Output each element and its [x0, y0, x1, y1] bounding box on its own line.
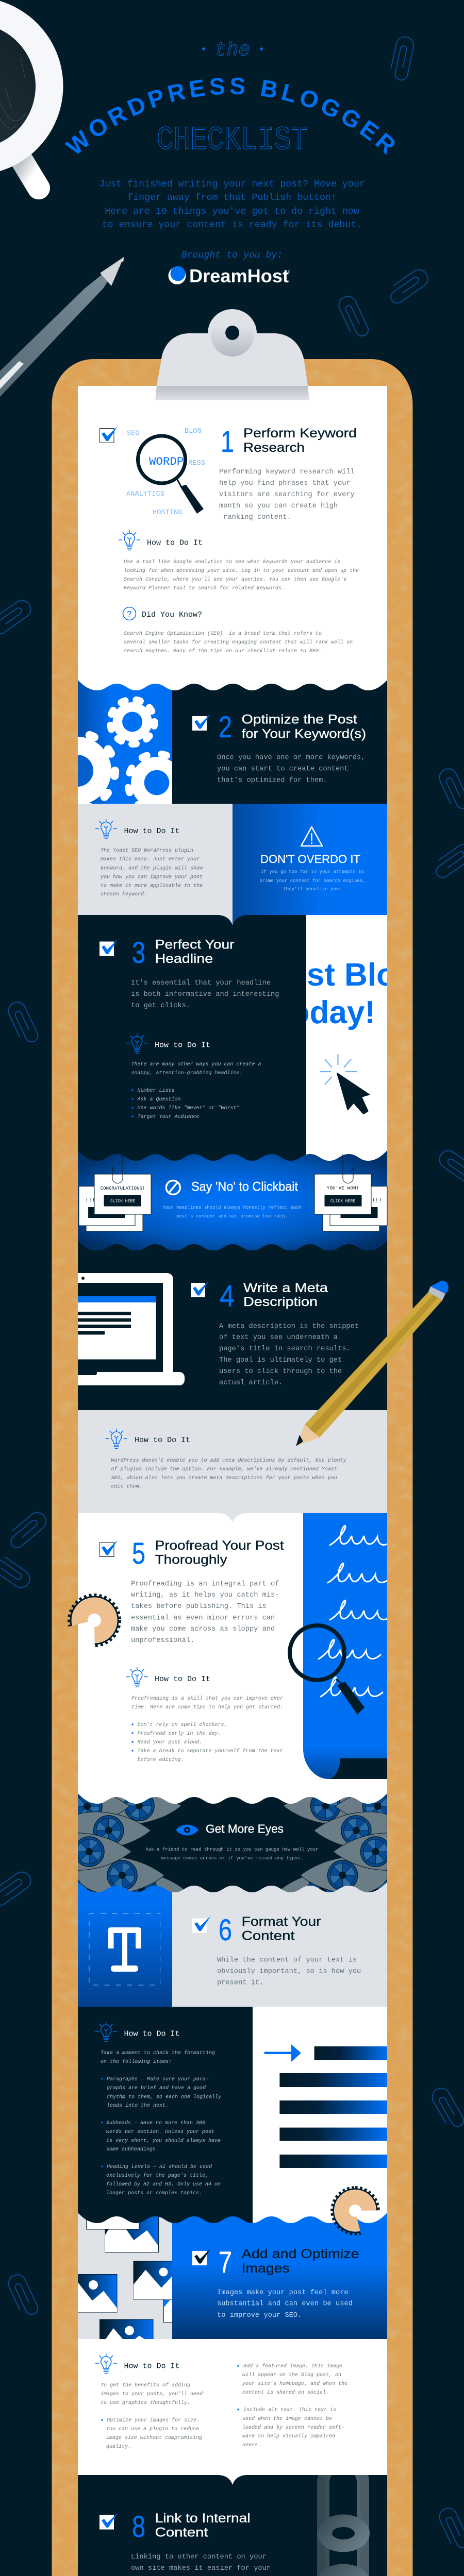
panel: step 2 how to do it — [78, 804, 233, 915]
body text: -ranking content. — [219, 514, 291, 521]
clipboard board — [52, 359, 412, 2576]
title — [64, 39, 395, 159]
how to text: makes this easy. Just enter your — [101, 856, 200, 862]
bullet list: Subheads – Have no more than 300 — [106, 2120, 205, 2126]
bullet list left: image size without compromising — [106, 2435, 202, 2441]
heading: Format Your — [242, 1914, 321, 1929]
body text: make you come across as sloppy and — [131, 1625, 275, 1633]
panel: step 7 images — [78, 2213, 387, 2339]
heading: for Your Keyword(s) — [242, 726, 366, 741]
bullet list: Number Lists — [137, 1088, 175, 1094]
bullet list: longer posts or complex topics. — [106, 2190, 202, 2196]
bullet list: before editing. — [137, 1757, 184, 1763]
how to text: edit them. — [111, 1484, 142, 1490]
bullet list: Target Your Audience — [137, 1114, 200, 1120]
icon: lightbulb — [106, 1429, 127, 1449]
bullet list left: Optimize your images for size. — [107, 2417, 200, 2424]
bullet list: graphs are brief and have a good — [107, 2085, 206, 2091]
bullet list right: used when the image cannot be — [242, 2416, 332, 2422]
speech bubble tail — [219, 915, 246, 925]
torn paper edge — [78, 673, 387, 690]
title: WORDPRESS BLOGGER — [64, 77, 395, 155]
icon: cursor arrow — [337, 1073, 369, 1114]
body text: A meta description is the snippet — [219, 1323, 359, 1330]
bullet list right: users. — [242, 2443, 261, 2448]
illustration: headline and cursor — [306, 962, 387, 1114]
bullet list: Ask a Question — [137, 1096, 181, 1103]
how to text: Use a tool like Google Analytics to see what keywords your audience is — [124, 559, 340, 565]
how to text: chosen keyword. — [101, 891, 147, 897]
bullet list: Proofread early in the day. — [137, 1731, 221, 1737]
checkbox — [191, 1281, 209, 1297]
did you know text: search engines. Many of the tips on our checklist relate to SEO. — [124, 648, 322, 654]
icon: grey pen — [0, 257, 124, 397]
icon: question mark: ? — [127, 610, 132, 620]
clickbait icon — [166, 1181, 180, 1194]
bullet list: Heading Levels – H1 should be used — [107, 2164, 212, 2170]
right stacked tickets — [314, 1154, 387, 1231]
callout heading: Say 'No' to Clickbait — [191, 1179, 298, 1194]
bullet list right: Include alt text. This text is — [243, 2407, 336, 2413]
bullet list right: loaded and by screen reader soft- — [242, 2425, 344, 2431]
headline fragment: Blog — [344, 957, 416, 993]
callout heading: DON'T OVERDO IT — [260, 853, 360, 866]
bullet list right: content is shared on social. — [242, 2389, 329, 2396]
how to text: images to your posts, you'll need — [101, 2391, 203, 2397]
panel: paper sheet — [78, 386, 387, 2576]
left stacked tickets: CLICK HERE — [110, 1199, 135, 1204]
how to do it heading: How to Do It — [155, 1675, 210, 1684]
panel: step 3 headline — [78, 915, 306, 1157]
body text: The goal is ultimately to get — [219, 1357, 342, 1364]
body text: essential as even minor errors can — [131, 1614, 275, 1622]
body text: to improve your SEO. — [217, 2312, 302, 2319]
left stacked tickets: CONGRATULATIONS! — [101, 1186, 145, 1191]
body text: Once you have one or more keywords, — [217, 754, 365, 761]
how to text: to use graphics thoughtfully. — [101, 2400, 190, 2406]
right stacked tickets: !!! — [372, 1198, 382, 1205]
intro text: Just finished writing your next post? Move your — [99, 179, 365, 190]
body text: It's essential that your headline — [131, 979, 271, 987]
heading: Optimize the Post — [242, 713, 357, 727]
checkbox — [100, 939, 118, 956]
illustration: chain — [317, 2475, 370, 2576]
icon: lightbulb — [95, 2022, 117, 2041]
headline fragment: st — [307, 957, 335, 993]
checkbox — [100, 426, 118, 443]
body text: visitors are searching for every — [219, 491, 355, 499]
callout text: they'll penalize you. — [283, 887, 342, 892]
panel: step 4 meta description — [62, 1241, 387, 1410]
title: CHECKLIST — [157, 122, 308, 159]
panel: step 1 keyword research — [100, 425, 359, 654]
icon: question mark — [123, 607, 136, 620]
how to text: looking for when accessing your site. Log in to your account and open up the — [124, 568, 359, 574]
bullet list: words per section. Unless your post — [106, 2129, 214, 2135]
panel: step 8 internal links — [78, 2475, 387, 2576]
body text: you can start to create content — [217, 766, 349, 773]
icon: lightbulb — [119, 530, 140, 550]
illustration: laptop — [78, 1273, 185, 1385]
how to do it heading: How to Do It — [124, 2362, 180, 2370]
left stacked tickets — [79, 1154, 151, 1231]
body text: that's optimized for them. — [217, 777, 327, 784]
bullet list — [131, 1722, 283, 1763]
title: the — [215, 39, 250, 61]
heading: Add and Optimize — [242, 2247, 359, 2261]
icon: click rays — [320, 1054, 357, 1084]
number 6: 6 — [219, 1913, 232, 1947]
did you know text: several smaller tasks for creating engaging content that will rank well on — [124, 639, 353, 646]
number 7: 7 — [219, 2246, 232, 2279]
headline fragment: Today! — [273, 995, 375, 1030]
bullet list left: quality. — [106, 2444, 131, 2450]
left stacked tickets: !!! — [85, 1198, 95, 1205]
how to do it heading: How to Do It — [155, 1041, 210, 1049]
illustration: magnifier with keywords: SEO — [127, 430, 140, 438]
right stacked tickets: YOU'VE WON! — [327, 1185, 359, 1191]
heading: Content — [155, 2525, 208, 2539]
how to text: SEO, which also lets you create meta descriptions for your posts when you — [111, 1475, 337, 1481]
how to text: Keyword Planner tool to search for related keywords. — [124, 585, 285, 591]
logo: DreamHost: DreamHost — [189, 265, 289, 286]
illustration: magnifier with keywords: HOSTING — [153, 509, 183, 517]
panel: step 7 how to do it — [78, 2339, 387, 2475]
panel: get more eyes — [78, 1793, 387, 1892]
body text: unprofessional. — [131, 1637, 194, 1645]
panel: step 6 how to do it — [78, 2007, 387, 2234]
how to do it heading: How to Do It — [124, 827, 180, 836]
bullet list: Don't rely on spell checkers. — [137, 1722, 227, 1728]
how to do it heading: How to Do It — [124, 2029, 180, 2038]
callout text: post's content and not promise too much. — [176, 1214, 288, 1219]
number 2: 2 — [219, 710, 232, 744]
bullet list right: Add a featured image. This image — [243, 2363, 342, 2369]
heading: Perfect Your — [155, 937, 235, 952]
bullet list: Read your post aloud. — [137, 1739, 203, 1745]
bullet list: exclusively for the page's title, — [106, 2173, 208, 2179]
bullet list — [131, 1088, 240, 1120]
heading: Research — [243, 440, 305, 455]
body text: to get clicks. — [131, 1002, 190, 1010]
bullet list right: ware to help visually impaired — [242, 2433, 335, 2439]
body text: Images make your post feel more — [217, 2289, 349, 2297]
icon: yellow pencil — [296, 1281, 449, 1446]
illustration: magnifier with keywords: RESS — [188, 460, 205, 467]
how to text: To get the benefits of adding — [101, 2382, 190, 2388]
icon: lightbulb — [95, 2353, 117, 2373]
did you know text: Search Engine Optimization (SEO) is a broad term that refers to — [124, 631, 322, 637]
callout heading: Get More Eyes — [206, 1822, 284, 1835]
how to text: Proofreading is a skill that you can improve over — [131, 1696, 283, 1702]
illustration: magnifier with keywords: BLOG — [185, 428, 202, 435]
callout text: Ask a friend to read through it so you can gauge how well your — [146, 1847, 318, 1852]
brought to you by: Brought to you by: — [181, 250, 283, 261]
how to text: keyword, and the plugin will show — [101, 866, 203, 872]
heading: Headline — [155, 952, 213, 966]
how to text: Take a moment to check the formatting — [101, 2050, 215, 2056]
panel: say no to clickbait — [78, 1143, 387, 1252]
headline fragment — [306, 962, 387, 1030]
icon: coffee mug — [0, 0, 63, 188]
body text: While the content of your text is — [217, 1957, 357, 1964]
intro text: to ensure your content is ready for its debut. — [102, 220, 362, 230]
bullet list — [101, 2076, 222, 2196]
bullet list: is very short, you should always have — [106, 2138, 221, 2144]
bullet list left: You can use a plugin to reduce — [106, 2426, 199, 2432]
callout text: If you go too far in your attempts to — [261, 870, 364, 875]
intro text: Here are 10 things you've got to do right now — [105, 207, 359, 217]
body text: help you find phrases that your — [219, 480, 351, 487]
callout text: Your headlines should always honestly reflect each — [162, 1205, 302, 1210]
illustration: image thumbnails — [78, 2216, 172, 2339]
callout text: message comes across or if you've missed any typos. — [161, 1856, 303, 1861]
body text: own site makes it easier for your — [131, 2565, 271, 2572]
bullet list: rhythm to them, so each one logically — [107, 2094, 222, 2100]
body text: is both informative and interesting — [131, 991, 279, 998]
how to text: Search Console, where you'll see your queries. You can then use Google's — [124, 577, 346, 583]
body text: substantial and can even be used — [217, 2300, 353, 2308]
number 4: 4 — [220, 1280, 235, 1313]
icon: eye — [176, 1825, 198, 1835]
illustration: magnifier with keywords: ANALYTICS — [126, 490, 164, 498]
bullet list left — [101, 2417, 202, 2450]
body text: writing, as it helps you catch mis- — [131, 1591, 279, 1599]
heading: Content — [242, 1929, 295, 1943]
body text: takes before publishing. This is — [131, 1603, 267, 1611]
how to text: of plugins include the option. For example, we've already mentioned Yoast — [111, 1466, 337, 1472]
callout text: prime your content for search engines, — [259, 878, 366, 884]
heading: Write a Meta — [243, 1281, 328, 1295]
number 8: 8 — [132, 2510, 145, 2544]
heading: Description — [243, 1295, 318, 1309]
panel: step 6 format — [78, 1882, 387, 2007]
body text: obviously important, so is how you — [217, 1968, 361, 1975]
checkbox — [192, 714, 210, 731]
panel: step 4 how to do it — [78, 1410, 387, 1513]
illustration: magnifier with keywords — [126, 428, 205, 517]
icon: lightbulb — [126, 1667, 148, 1687]
checkbox — [192, 1916, 210, 1933]
icon: pencil shaving — [69, 1595, 120, 1646]
illustration: eyes left — [78, 1793, 184, 1892]
panel: step 2 optimize — [78, 680, 387, 804]
number 3: 3 — [132, 936, 145, 970]
body text: page's title in search results. — [219, 1345, 351, 1353]
body text: Performing keyword research will — [219, 468, 355, 476]
did you know heading: Did You Know? — [142, 611, 202, 619]
body text: actual article. — [219, 1379, 283, 1387]
checkbox — [100, 1540, 118, 1557]
how to text: time. Here are some tips to help you get started: — [131, 1704, 283, 1710]
how to do it heading: How to Do It — [135, 1436, 190, 1445]
bullet list right: your site's homepage, and when the — [242, 2381, 347, 2387]
panel: top clip — [155, 309, 309, 400]
illustration: text bars — [279, 2046, 387, 2168]
icon: lightbulb — [95, 819, 117, 839]
illustration: eyes right — [281, 1794, 387, 1892]
panel: step 5 proofread — [69, 1513, 392, 1802]
icon: arrow — [264, 2044, 301, 2062]
body text: of text you see underneath a — [219, 1334, 338, 1342]
heading: Thoroughly — [155, 1553, 227, 1567]
icon: lightbulb — [126, 1033, 148, 1053]
torn paper edge — [78, 1786, 387, 1804]
checkbox — [192, 2248, 210, 2265]
bullet list: Take a break to separate yourself from the text — [137, 1748, 283, 1754]
how to text: There are many other ways you can create a — [131, 1061, 261, 1067]
body text: users to click through to the — [219, 1368, 342, 1376]
heading: Perform Keyword — [243, 426, 357, 440]
bullet list right: will appear on the blog post, on — [242, 2372, 341, 2378]
how to text: WordPress doesn't enable you to add meta descriptions by default, but plenty — [111, 1458, 347, 1464]
how to text: snappy, attention-grabbing headline. — [131, 1070, 243, 1076]
bullet list: Paragraphs – Make sure your para- — [107, 2076, 209, 2082]
illustration: magnifier with keywords: WORDP — [149, 455, 184, 468]
right stacked tickets: CLICK HERE — [330, 1199, 355, 1204]
bullet list: Use words like "Never" or "Worst" — [137, 1105, 240, 1111]
bullet list: followed by H2 and H3. Only use H4 on — [106, 2181, 221, 2188]
how to text: to make it more applicable to the — [101, 883, 203, 889]
icon: warning triangle — [301, 827, 322, 846]
body text: Linking to other content on your — [131, 2553, 267, 2561]
bullet list: some subheadings. — [106, 2146, 159, 2153]
heading: Proofread Your Post — [155, 1538, 284, 1553]
body text: month so you can create high — [219, 502, 338, 510]
body text: Proofreading is an integral part of — [131, 1580, 279, 1588]
icon: pencil shaving — [332, 2188, 378, 2234]
icon: text tool — [89, 1913, 160, 1985]
bullet list: leads into the next. — [107, 2103, 169, 2109]
bullet list right — [237, 2363, 347, 2448]
how to text: on the following items: — [101, 2059, 172, 2065]
body text: present it. — [217, 1979, 263, 1987]
intro text: finger away from that Publish button! — [127, 193, 337, 203]
panel: don't overdo it — [233, 804, 387, 915]
how to do it heading: How to Do It — [147, 539, 203, 547]
illustration: gears — [78, 697, 172, 804]
number 1: 1 — [221, 425, 234, 459]
illustration: handwriting scroll — [290, 1513, 392, 1779]
how to text: The Yoast SEO WordPress plugin — [101, 848, 193, 854]
heading: Link to Internal — [155, 2511, 251, 2526]
checkbox — [100, 2513, 118, 2530]
how to text: you how you can improve your post — [100, 874, 203, 880]
heading: Images — [242, 2261, 290, 2276]
number 5: 5 — [132, 1537, 145, 1570]
